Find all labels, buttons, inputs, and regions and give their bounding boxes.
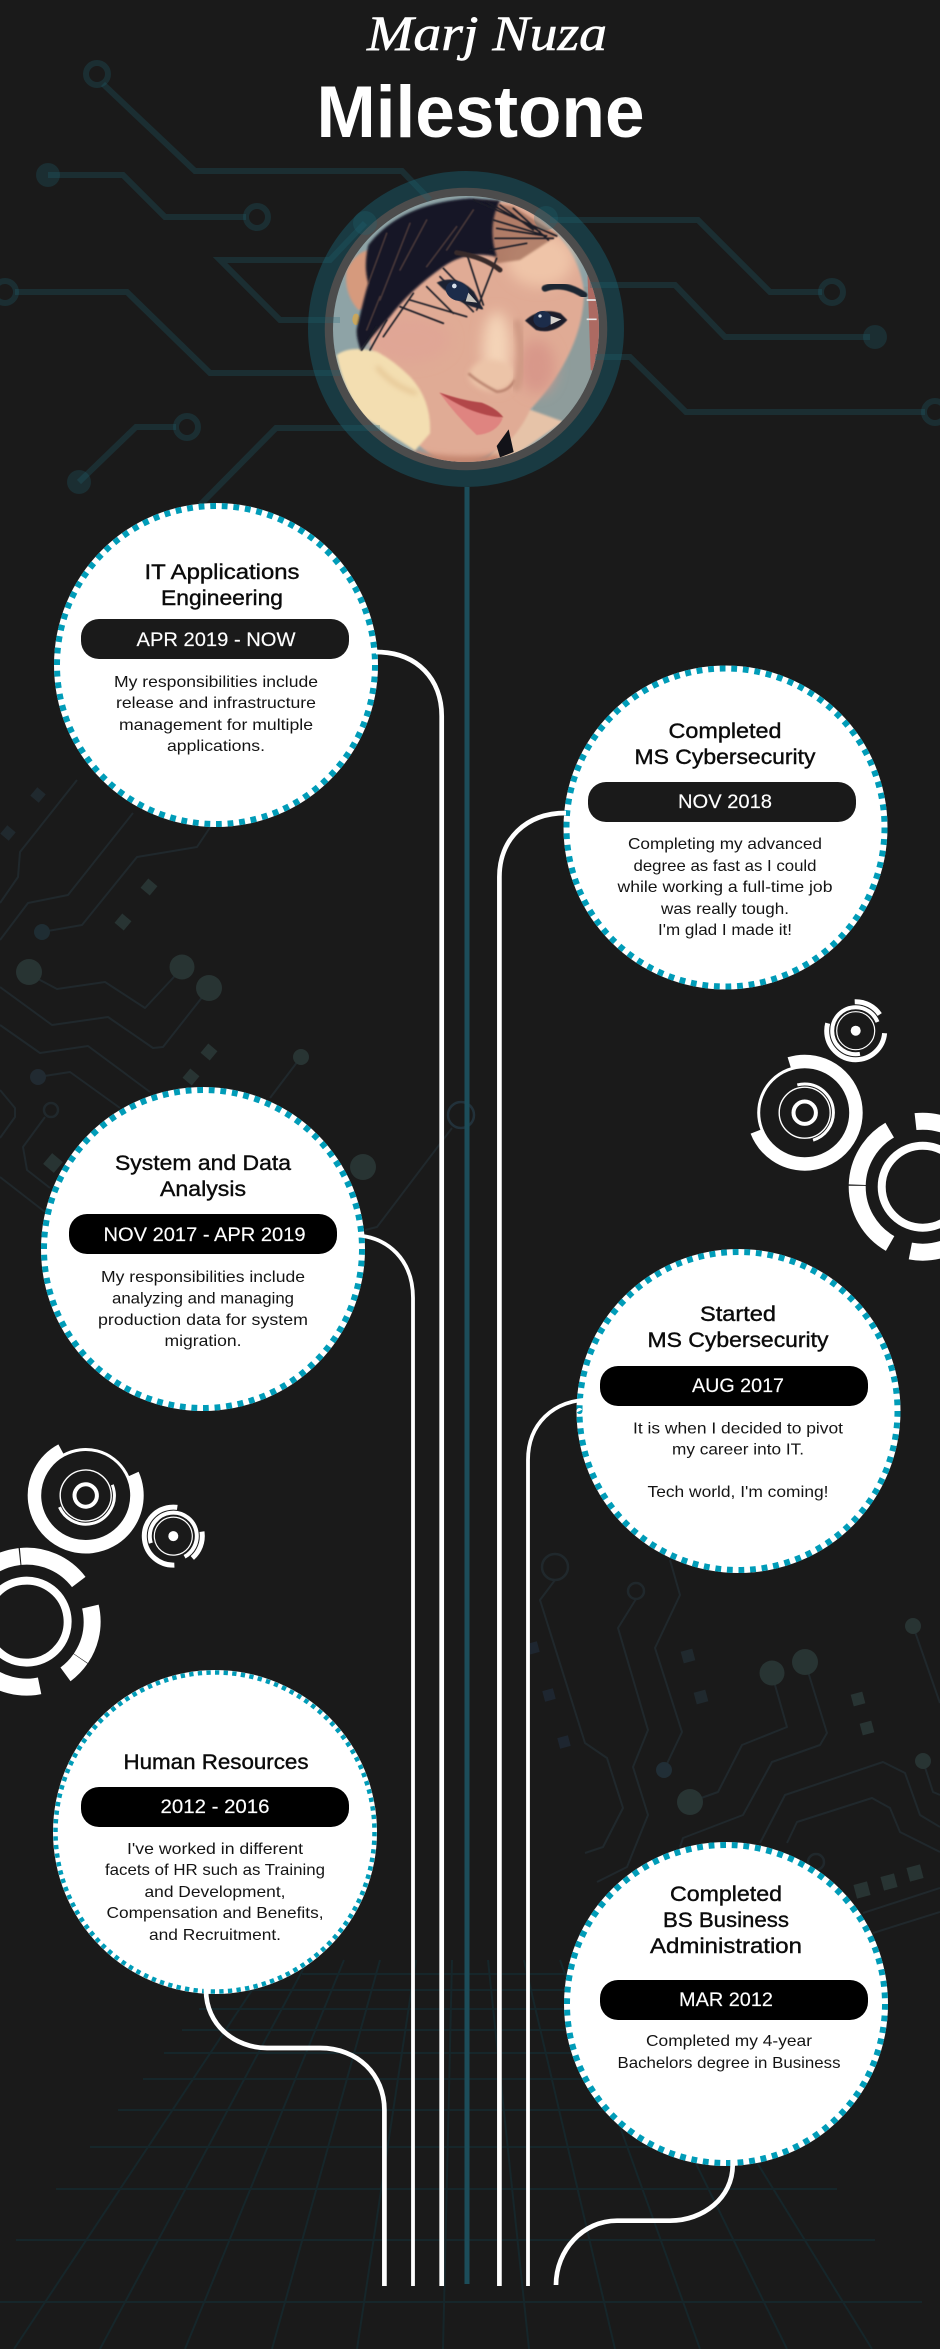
connector: Human Resources	[206, 1983, 384, 2286]
eyes	[437, 280, 483, 309]
face	[365, 201, 584, 463]
description: while working a full-time job	[616, 879, 833, 896]
description	[618, 2033, 840, 2072]
description: and Development,	[144, 1884, 286, 1901]
heading: System and Data	[115, 1151, 291, 1175]
portrait photo	[330, 193, 603, 467]
connector: BS Business	[556, 2157, 733, 2285]
description	[98, 1269, 308, 1350]
heading: Completed	[670, 1882, 782, 1906]
date pill	[69, 1214, 337, 1254]
panel: Started MS Cybersecurity	[576, 1249, 900, 1573]
description: Bachelors degree in Business	[618, 2055, 840, 2072]
date pill	[81, 1787, 349, 1827]
panel: Completed BS Business Administration	[564, 1842, 888, 2166]
panel: Completed MS Cybersecurity: MS Cybersecurity	[634, 745, 816, 769]
description: was really tough.	[660, 901, 789, 918]
description	[616, 836, 833, 939]
black strap	[497, 429, 514, 457]
hair	[492, 203, 558, 264]
background: circuit top	[0, 63, 940, 505]
heading: Human Resources	[124, 1750, 308, 1774]
date pill: MAR 2012	[679, 1989, 773, 2011]
description: Compensation and Benefits,	[106, 1905, 324, 1922]
title: Milestone: Milestone	[316, 72, 644, 153]
description: management for multiple	[119, 717, 313, 734]
description: migration.	[164, 1333, 242, 1350]
date pill: NOV 2017 - APR 2019	[104, 1224, 306, 1246]
background: circuit right lower	[526, 1554, 940, 1933]
photo frame with portrait	[316, 180, 616, 478]
background: perspective grid	[0, 1960, 922, 2349]
background: circuit left middle	[0, 780, 474, 1230]
connector: Started MS	[528, 1400, 592, 2286]
heading: Started	[700, 1302, 776, 1326]
panel: Completed BS Business Administration: Administration	[650, 1934, 802, 1958]
description: Completed my 4-year	[646, 2033, 813, 2050]
description	[633, 1420, 844, 1501]
panel: Completed MS Cybersecurity	[564, 666, 888, 990]
title: name: Marj Nuza	[366, 5, 607, 61]
connector: Completed MS	[499, 813, 566, 2286]
panel: IT Applications Engineering: Engineering	[161, 586, 283, 610]
fist	[337, 349, 430, 451]
icon: gears right	[752, 1002, 940, 1252]
panel: Human Resources	[53, 1670, 377, 1994]
description: I've worked in different	[127, 1841, 304, 1858]
panel: System and Data Analysis: Analysis	[160, 1177, 246, 1201]
connector: IT Applications	[376, 652, 442, 2286]
nose	[483, 312, 511, 388]
description: applications.	[167, 738, 265, 755]
connector: System and Data	[350, 1235, 413, 2286]
date pill	[81, 619, 349, 659]
panel: IT Applications Engineering	[54, 503, 378, 827]
date pill: AUG 2017	[692, 1375, 784, 1397]
date pill	[600, 1980, 868, 2020]
description: I'm glad I made it!	[658, 922, 792, 939]
heading: Completed	[668, 719, 782, 743]
description: release and infrastructure	[116, 695, 316, 712]
mouth	[439, 393, 503, 435]
panel: Completed BS Business Administration: BS Business	[663, 1908, 789, 1932]
description: facets of HR such as Training	[105, 1862, 325, 1879]
description: Tech world, I'm coming!	[648, 1484, 828, 1501]
description: Completing my advanced	[628, 836, 822, 853]
heading: IT Applications	[144, 560, 300, 584]
description	[114, 674, 318, 755]
description: My responsibilities include	[101, 1269, 305, 1286]
description: my career into IT.	[672, 1442, 804, 1458]
date pill: APR 2019 - NOW	[136, 629, 296, 651]
description: It is when I decided to pivot	[633, 1420, 844, 1438]
date pill	[600, 1366, 868, 1406]
date pill: 2012 - 2016	[160, 1796, 270, 1818]
description: degree as fast as I could	[634, 858, 816, 875]
date pill	[588, 782, 856, 822]
description: analyzing and managing	[112, 1290, 294, 1308]
description: production data for system	[98, 1312, 308, 1329]
icon: gears left	[0, 1430, 218, 1695]
date pill: NOV 2018	[678, 791, 772, 813]
description	[105, 1841, 325, 1944]
central timeline line	[464, 487, 470, 2284]
description: My responsibilities include	[114, 674, 318, 691]
description: and Recruitment.	[149, 1927, 281, 1944]
panel: System and Data Analysis	[41, 1087, 365, 1411]
panel: Started MS Cybersecurity: MS Cybersecurity	[648, 1328, 829, 1352]
